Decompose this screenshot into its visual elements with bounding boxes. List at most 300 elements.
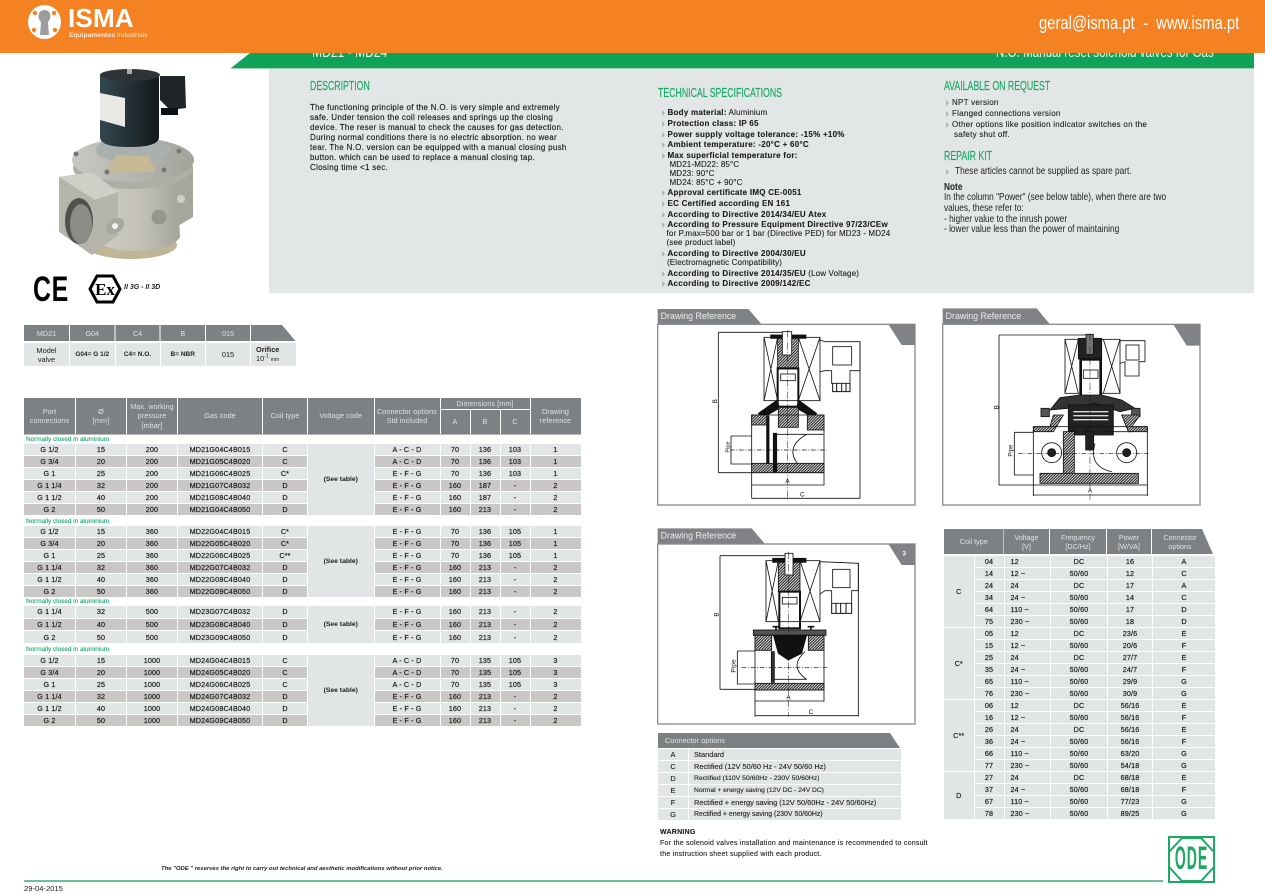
table rows: MD22: E - F - G [393, 563, 421, 572]
table rows: MD22: 1 [553, 551, 558, 560]
table rows: MD22: 360 [146, 587, 158, 596]
table rows: coil types: 66 [985, 749, 993, 758]
table rows: MD21: 200 [146, 493, 158, 502]
table: model code: MD21 [37, 328, 56, 338]
table rows: coil types: 56/16 [1121, 701, 1139, 710]
table rows: MD24: 1000 [144, 704, 160, 713]
table rows: MD21: 2 [553, 481, 558, 490]
table rows: coil types: 24/7 [1123, 665, 1137, 674]
table rows: coil types: 27 [985, 773, 993, 782]
text block: technical specifications list: Approval certificate IMQ CE-0051 [668, 188, 802, 197]
text block: available on request list: safety shut off. [954, 130, 1010, 139]
table rows: MD22: - [514, 575, 516, 584]
table: model code: valve [38, 354, 55, 364]
text block: description [310, 103, 567, 172]
table rows: MD23: 213 [479, 607, 491, 616]
table: connector options: A [671, 750, 675, 759]
table rows: coil types: F [1182, 713, 1186, 722]
table rows: coil types: 50/60 [1070, 617, 1088, 626]
green title band [231, 44, 1254, 69]
logo tagline: Equipamentos Industriais [69, 32, 147, 39]
table rows: MD22: 1 [553, 539, 558, 548]
table rows: MD24: 2 [553, 704, 558, 713]
section label: MD21: Normally closed in aluminium [26, 436, 109, 442]
table: model code: Model [36, 346, 57, 354]
text block: available on request list: Other options like position indicator switches on the [952, 120, 1147, 129]
table rows: MD23: MD23G07C4B032 [190, 607, 250, 616]
flange [73, 147, 193, 189]
table rows: MD23: MD23G08C4B040 [190, 620, 250, 629]
table rows: MD21: 200 [146, 457, 158, 466]
atex classification: II 3G - II 3D [124, 284, 160, 291]
table rows: MD24: 1000 [144, 668, 160, 677]
icon: ODE logo: ODE [1175, 842, 1208, 877]
dimension labels: B [712, 399, 719, 403]
table rows: MD23: 50 [97, 632, 105, 642]
table rows: coil types: 68/18 [1121, 773, 1139, 782]
table rows: MD24: - [514, 704, 516, 713]
table rows: coil types: 50/60 [1070, 641, 1088, 650]
table rows: coil types: 230 ~ [1010, 689, 1029, 698]
table rows: MD21: 1 [553, 457, 558, 466]
text block: description: device. The reser is manual to check the causes for gas detection. [310, 123, 564, 132]
table rows: coil types: 76 [985, 689, 993, 698]
table rows: MD22: - [514, 587, 516, 596]
table rows: coil types: E [1182, 701, 1186, 710]
table rows: MD21: A - C - D [393, 457, 421, 466]
icon: Ex atex mark: Ex [95, 280, 115, 299]
table rows: MD24: G 2 [43, 716, 56, 725]
table rows: MD21: 70 [451, 445, 459, 454]
band title: model: MD21 - MD24 [312, 44, 387, 61]
table rows: coil types: 230 ~ [1010, 761, 1029, 770]
table rows: coil types: 50/60 [1070, 797, 1088, 806]
table rows: MD21: 32 [97, 481, 105, 490]
table rows: MD23: 213 [479, 632, 491, 642]
table rows: MD23: 500 [146, 620, 158, 629]
main table header: reference [540, 416, 571, 425]
table rows: coil types: C* [955, 659, 963, 668]
table rows: coil types: G [1181, 749, 1187, 758]
table rows: MD24: 70 [451, 668, 459, 677]
table rows: coil types: 34 [985, 593, 993, 602]
table rows: MD24: 160 [449, 704, 461, 713]
table rows: MD24: 213 [479, 704, 491, 713]
body lugs [103, 215, 127, 237]
text block: technical specifications list: Ambient temperature: -20°C + 60°C [668, 140, 809, 149]
table rows: MD21: 103 [509, 469, 521, 478]
table rows: MD24: E - F - G [393, 716, 421, 725]
table rows: MD21: 200 [146, 469, 158, 478]
text block: repair kit note: These articles cannot be supplied as spare part. [955, 165, 1132, 177]
table: model code: G04= G 1/2 [75, 351, 109, 358]
table rows: MD24: A - C - D [393, 668, 421, 677]
table rows: coil types: 06 [985, 701, 993, 710]
table rows: MD22: 20 [97, 539, 105, 548]
table: connector options: D [670, 774, 676, 783]
table rows: coil types: E [1182, 653, 1186, 662]
table rows: MD22: 160 [449, 587, 461, 596]
table rows: coil types: 20/6 [1123, 641, 1137, 650]
table: connector options: Rectified + energy saving (230V 50/60Hz) [694, 811, 823, 818]
table rows: MD22: 360 [146, 539, 158, 548]
table rows: coil types: D [956, 791, 961, 800]
table rows: coil types: DC [1074, 557, 1084, 566]
table rows: MD21: 136 [479, 457, 491, 466]
table rows: coil types: F [1182, 785, 1186, 794]
dimension labels: Pipe [1008, 444, 1014, 457]
table rows: coil types: 23/6 [1123, 629, 1137, 638]
table rows: MD24 [24, 655, 581, 726]
table rows: MD24: 3 [553, 656, 558, 665]
table rows: MD23: MD23G09C4B050 [190, 632, 250, 642]
table rows: coil types: E [1182, 725, 1186, 734]
table rows: MD22: MD22G04C4B015 [190, 527, 250, 536]
table rows: coil types: G [1181, 761, 1187, 770]
table rows: MD23: 500 [146, 632, 158, 642]
table rows: MD22: G 1 [43, 551, 56, 560]
text block: technical specifications list: MD23: 90°C [670, 169, 715, 178]
table: connector options: Rectified (110V 50/60Hz - 230V 50/60Hz) [694, 775, 819, 782]
orange header bar [0, 0, 1265, 53]
table rows: coil types: 12 ~ [1010, 641, 1025, 650]
table rows: MD21: 1 [553, 445, 558, 454]
table rows: MD22: 2 [553, 563, 558, 572]
text block: description: Closing time <1 sec. [310, 163, 388, 172]
flange screws [74, 152, 78, 156]
table rows: MD22: 25 [97, 551, 105, 560]
table rows: coil types: G [1181, 689, 1187, 698]
table: connector options: Standard [694, 750, 724, 759]
table rows: MD22: 32 [97, 563, 105, 572]
main table header: A [453, 417, 457, 426]
table rows: MD22: 213 [479, 587, 491, 596]
table rows: MD23: G 1 1/4 [37, 607, 62, 616]
heading: technical specifications: TECHNICAL SPECIFICATIONS [658, 86, 782, 100]
table rows: MD22: 360 [146, 563, 158, 572]
table rows: MD22: 213 [479, 575, 491, 584]
table rows: coil types: 35 [985, 665, 993, 674]
table rows: coil types: 17 [1126, 605, 1134, 614]
table rows: MD21: G 1 [43, 469, 56, 478]
table: model code: 015 [222, 350, 234, 359]
table header: coil types: Power [1119, 532, 1139, 542]
left port block [59, 172, 118, 255]
table rows: MD23: 32 [97, 607, 105, 616]
table rows: coil types: D [1181, 605, 1187, 614]
table rows: MD22: C* [281, 527, 289, 536]
table rows: MD23: G 2 [43, 632, 56, 642]
table rows: coil types: 50/60 [1070, 761, 1088, 770]
main table header: Port [43, 406, 56, 416]
table rows: MD22: E - F - G [393, 539, 421, 548]
table rows: coil types: 50/60 [1070, 593, 1088, 602]
table rows: MD23: E - F - G [393, 620, 421, 629]
table rows: MD22: 360 [146, 575, 158, 584]
table rows: coil types: 25 [985, 653, 993, 662]
table rows: MD21: 2 [553, 493, 558, 502]
table: model code [24, 325, 296, 366]
main table header: connections [30, 416, 69, 425]
table rows: MD24: E - F - G [393, 692, 421, 701]
table rows: coil types: 110 ~ [1010, 749, 1029, 758]
table rows: MD24: 2 [553, 692, 558, 701]
table rows: MD21: MD21G08C4B040 [190, 493, 250, 502]
table: model code: B= NBR [171, 351, 195, 358]
text block: power note [944, 181, 1166, 235]
table rows: coil types: C [1181, 593, 1187, 602]
table rows: MD21: G 1 1/2 [37, 493, 62, 502]
table rows: MD24: - [514, 716, 516, 725]
table rows: MD24: 105 [509, 668, 521, 677]
text block: technical specifications list: EC Certified according EN 161 [668, 199, 790, 208]
drawing reference 1 [657, 309, 916, 506]
table rows: MD21: A - C - D [393, 445, 421, 454]
table rows: MD24: G 1 1/4 [37, 692, 62, 701]
table rows: MD22: G 3/4 [40, 539, 59, 548]
table rows: coil types: 110 ~ [1010, 677, 1029, 686]
dimension labels: B [713, 612, 720, 617]
table rows: coil types: 50/60 [1070, 689, 1088, 698]
heading: repair kit: REPAIR KIT [944, 149, 992, 163]
table rows: coil types: 18 [1126, 617, 1134, 626]
table rows: coil types: G [1181, 677, 1187, 686]
main table header: Std included [387, 416, 427, 425]
table divider [24, 434, 581, 435]
coil label [100, 93, 125, 127]
table rows: coil types: 50/60 [1070, 713, 1088, 722]
table rows: MD24: G 1 1/2 [37, 704, 62, 713]
table rows: MD21: E - F - G [393, 469, 421, 478]
reference number [888, 544, 915, 565]
table rows: MD21: 70 [451, 469, 459, 478]
dimension labels: Pipe [730, 659, 737, 673]
table rows: coil types: F [1182, 737, 1186, 746]
table rows: coil types: 89/25 [1121, 809, 1139, 818]
table rows: MD22: 136 [479, 539, 491, 548]
text block: technical specifications list: for P.max=500 bar or 1 bar (Directive PED) for MD23 - MD24 [666, 229, 890, 238]
table rows: coil types: 230 ~ [1010, 617, 1029, 626]
text block: description: The functioning principle of the N.O. is very simple and extremely [310, 103, 560, 112]
table rows: coil types: 65 [985, 677, 993, 686]
table rows: MD23: 160 [449, 607, 461, 616]
table rows: coil types: 27/7 [1123, 653, 1137, 662]
dimension labels [993, 405, 1093, 495]
text block: technical specifications list: (see product label) [666, 238, 735, 247]
text block: available on request list: Flanged connections version [952, 109, 1061, 118]
panel: grey information panel [269, 69, 1254, 293]
table rows: MD24: C [282, 656, 288, 665]
table rows: MD24: 32 [97, 692, 105, 701]
table rows: MD21: G 2 [43, 505, 56, 514]
table rows: MD23: 500 [146, 607, 158, 616]
table: model code: Orifice [256, 344, 279, 354]
text block: warning: For the solenoid valves installation and maintenance is recommended to consult [660, 840, 928, 847]
valve body [95, 172, 180, 251]
table rows: MD22: E - F - G [393, 551, 421, 560]
text block: technical specifications list: According to Directive 2004/30/EU [668, 249, 806, 258]
table rows: coil types: 67 [985, 797, 993, 806]
black coil [100, 75, 159, 147]
table rows: coil types: D [1181, 617, 1187, 626]
electrical connector [160, 76, 186, 110]
table rows: MD22: 105 [509, 539, 521, 548]
table rows: coil types: 14 [1126, 593, 1134, 602]
table rows: MD22: 136 [479, 527, 491, 536]
tab [658, 528, 765, 544]
table rows: MD24: MD24G08C4B040 [190, 704, 250, 713]
table rows: MD21: G 1 1/4 [37, 481, 62, 490]
table rows: coil types: 68/18 [1121, 785, 1139, 794]
table rows: MD22: D [282, 587, 288, 596]
table rows: MD22: 50 [97, 587, 105, 596]
dimension labels [713, 612, 814, 716]
table rows: MD21: E - F - G [393, 481, 421, 490]
table rows: coil types: 37 [985, 785, 993, 794]
table rows: coil types: 54/18 [1121, 761, 1139, 770]
dimension labels [712, 399, 805, 499]
valve section [720, 552, 858, 717]
text block: power note: In the column "Power" (see below table), when there are two [944, 191, 1166, 203]
table rows: coil types: 24 [1010, 653, 1019, 662]
table header: coil types: Voltage [1014, 532, 1038, 542]
table rows: coil types: 50/60 [1070, 749, 1088, 758]
table rows: MD21: 200 [146, 505, 158, 514]
table rows: MD22: E - F - G [393, 575, 421, 584]
table rows: MD23: D [282, 607, 288, 616]
main table header: Voltage code [319, 411, 362, 420]
table rows: MD24: E - F - G [393, 704, 421, 713]
section label: MD24: Normally closed in aluminium [26, 646, 109, 652]
table rows: MD21: 160 [449, 481, 461, 490]
table rows: coil types: E [1182, 773, 1186, 782]
text block: description: During normal conditions there is no electric absorption. no wear [310, 133, 557, 142]
table rows: coil types: C [1181, 569, 1187, 578]
table rows: coil types: F [1182, 641, 1186, 650]
main table header: Drawing [542, 406, 569, 416]
table rows: MD21: C [282, 457, 288, 466]
table rows: MD21: MD21G05C4B020 [190, 457, 250, 466]
table rows: coil types: 56/16 [1121, 725, 1139, 734]
table rows: MD24: MD24G04C4B015 [190, 656, 250, 665]
icon: ODE logo [1168, 836, 1215, 883]
panel: product photo [59, 69, 194, 259]
table rows: coil types: 24 [1010, 581, 1019, 590]
table rows: MD21: 200 [146, 481, 158, 490]
text block: technical specifications list: Body material: Aluminium [668, 108, 767, 117]
table rows: MD23: 213 [479, 620, 491, 629]
text block: description: button. which can be used to replace a manual closing tap. [310, 153, 535, 162]
table rows: MD21: MD21G06C4B025 [190, 469, 250, 478]
table rows: MD24: 105 [509, 680, 521, 689]
table rows: MD22: 213 [479, 563, 491, 572]
text block: technical specifications list: MD24: 85°C + 90°C [670, 178, 743, 187]
contact details: geral@isma.pt - www.isma.pt [1039, 13, 1239, 33]
table header: coil types: [W/VA] [1118, 542, 1140, 550]
table rows: MD21: D [282, 481, 288, 490]
table rows: coil types: A [1182, 557, 1186, 566]
disclaimer: The "ODE " reserves the right to carry out technical and aesthetic modifications without prior notice. [161, 866, 443, 872]
table header: coil types: Frequency [1061, 532, 1095, 542]
text block: technical specifications list: According to Pressure Equipment Directive 97/23/CEw [668, 220, 888, 229]
table rows: MD24: (See table) [324, 687, 358, 694]
table rows: coil types: C** [953, 731, 964, 740]
table rows: MD21: 2 [553, 505, 558, 514]
dimension labels: Pipe [725, 441, 731, 453]
table rows: MD24: 2 [553, 716, 558, 725]
table rows: MD21: 160 [449, 493, 461, 502]
text block: description: tear. The N.O. version can be equipped with a manual closing push [310, 143, 567, 152]
table rows: coil types: 30/9 [1123, 689, 1137, 698]
table rows: coil types: G [1181, 797, 1187, 806]
table rows: MD21: - [514, 505, 516, 514]
table rows: MD23: D [282, 620, 288, 629]
table rows: MD23: (See table) [324, 621, 358, 628]
heading: description: DESCRIPTION [310, 79, 370, 93]
table rows: MD24: D [282, 692, 288, 701]
table rows: MD24: D [282, 704, 288, 713]
table rows: MD22: 160 [449, 563, 461, 572]
table: connector options: C [670, 762, 676, 771]
table rows: coil types: DC [1074, 725, 1084, 734]
table rows: MD23: 160 [449, 620, 461, 629]
table rows: coil types: 12 ~ [1010, 713, 1025, 722]
table: connector options: Normal + energy saving (12V DC - 24V DC) [694, 787, 824, 794]
table rows: coil types: 15 [985, 641, 993, 650]
valve base [85, 231, 177, 259]
table rows: MD22: 136 [479, 551, 491, 560]
table rows: MD21: D [282, 505, 288, 514]
table rows: MD21: G 1/2 [40, 445, 59, 454]
table rows: MD24: 135 [479, 668, 491, 677]
table rows: MD21: 70 [451, 457, 459, 466]
text block: technical specifications list [662, 108, 890, 288]
table rows: MD21: E - F - G [393, 505, 421, 514]
table rows: MD21: 103 [509, 445, 521, 454]
icon: ISMA logo mark [28, 5, 61, 39]
table rows: coil types: 50/60 [1070, 665, 1088, 674]
table rows: coil types: 77 [985, 761, 993, 770]
table rows: MD22: 105 [509, 551, 521, 560]
table rows: MD24: 25 [97, 680, 105, 689]
table rows: coil types: 05 [985, 629, 993, 638]
table rows: MD21: - [514, 481, 516, 490]
table rows: coil types: 29/9 [1123, 677, 1137, 686]
table rows: MD21: 1 [553, 469, 558, 478]
main table header: B [483, 417, 487, 426]
main table header: [mm] [93, 416, 109, 425]
table: connector options: Rectified (12V 50/60 Hz - 24V 50/60 Hz) [694, 762, 826, 771]
valve section [999, 333, 1148, 500]
main table header: Connector options [377, 406, 437, 416]
table rows: MD21: 187 [479, 481, 491, 490]
table rows: MD24: 213 [479, 716, 491, 725]
table rows: MD24: 1000 [144, 692, 160, 701]
table rows: MD23: 2 [553, 632, 558, 642]
text block: technical specifications list: MD21-MD22: 85°C [670, 160, 739, 169]
table: model code: B [180, 328, 185, 338]
table rows: MD22: 15 [97, 527, 105, 536]
table rows: coil types: 12 [1010, 557, 1019, 566]
table header: coil types: [DC/Hz] [1065, 542, 1091, 550]
table rows: MD21: G 3/4 [40, 457, 59, 466]
table rows: MD22: E - F - G [393, 587, 421, 596]
table rows: MD22: E - F - G [393, 527, 421, 536]
table rows: MD21: 20 [97, 457, 105, 466]
tab: Drawing Reference [661, 311, 736, 321]
table rows: MD21: 200 [146, 445, 158, 454]
table rows: MD21: - [514, 493, 516, 502]
